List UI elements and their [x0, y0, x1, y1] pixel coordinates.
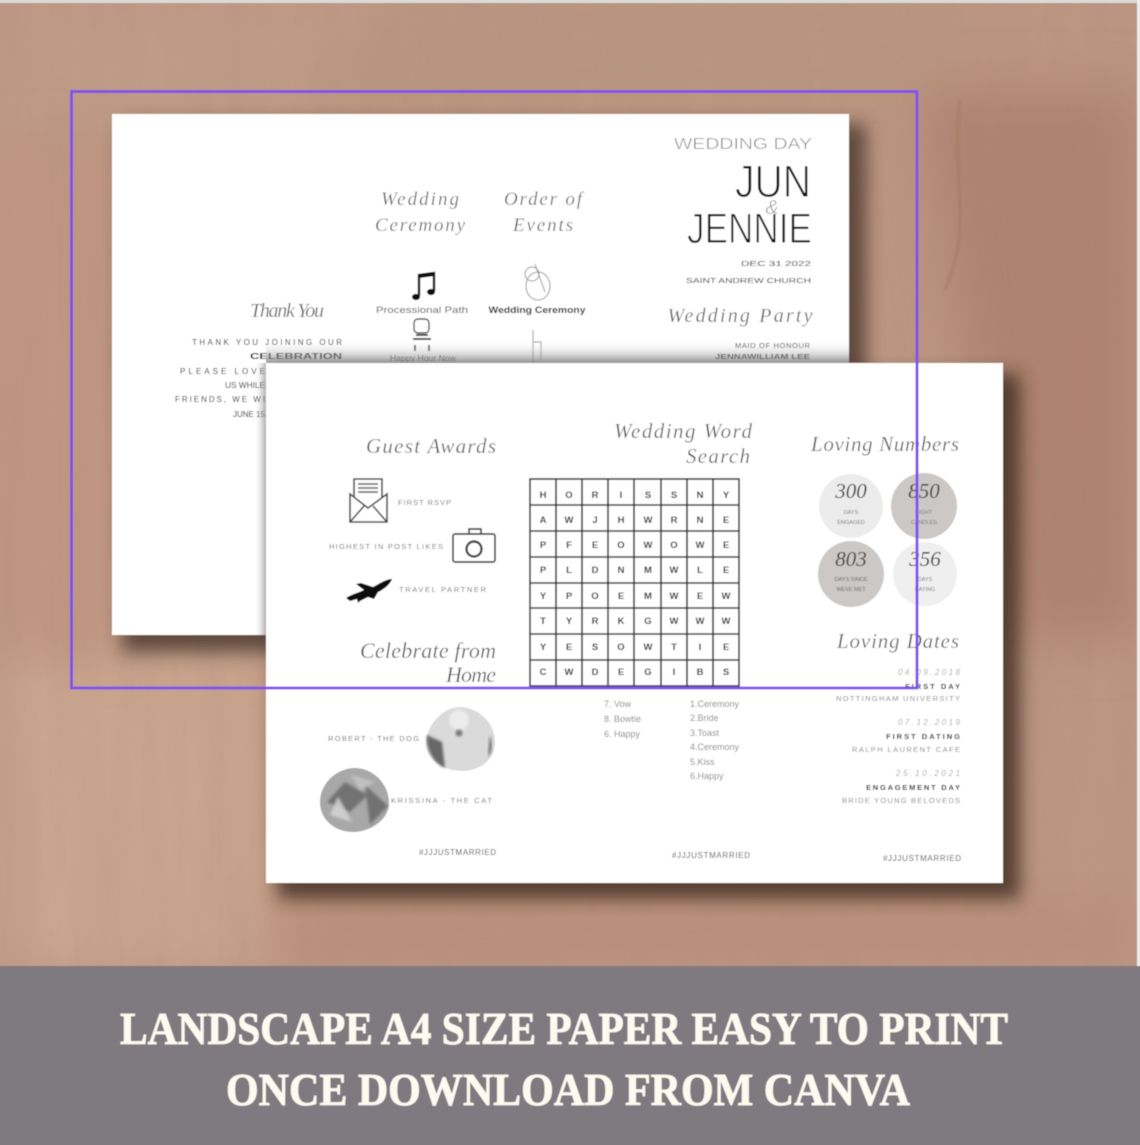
text: timeline dates: ENGAGEMENT DAY: [866, 783, 960, 792]
icon: wedding rings: [525, 264, 550, 300]
text: hashtag right: #JJJUSTMARRIED: [883, 854, 961, 863]
chart: word search grid: E: [723, 540, 729, 551]
text: word list one: 8. Bowtie: [604, 714, 641, 724]
chart: word search grid: G: [644, 667, 652, 678]
chart: word search grid: E: [618, 591, 624, 602]
text: cat caption: KRISSINA - THE CAT: [391, 796, 493, 805]
text: word list two: 2.Bride: [690, 713, 719, 723]
chart: word search grid: J: [592, 515, 598, 526]
text: party names: MAID OF HONOUR: [735, 341, 811, 350]
text: party names: JENNAWILLIAM LEE: [715, 352, 810, 361]
chart: word search grid: F: [566, 540, 572, 551]
text: thank you note: PLEASE LOVE: [180, 367, 265, 376]
text: first rsvp: FIRST RSVP: [398, 498, 452, 507]
chart: word search grid: G: [644, 616, 652, 627]
chart: word search grid: I: [699, 642, 701, 653]
chart: word search grid: P: [566, 591, 573, 602]
heading: guest awards: Guest Awards: [366, 434, 496, 458]
text: date and venue: DEC 31 2022: [741, 259, 811, 268]
chart: word search grid: M: [644, 591, 652, 602]
chart: word search grid: W: [670, 591, 679, 602]
chart: stat circle 356: DAYS: [918, 577, 933, 583]
icon: envelope: [350, 479, 387, 522]
heading: celebrate from home: Home: [445, 662, 496, 687]
text: timeline dates: BRIDE YOUNG BELOVEDS: [842, 796, 960, 805]
chart: word search grid: R: [592, 616, 599, 627]
chart: stat circle 300: DAYS: [844, 510, 859, 516]
chart: word search grid: O: [617, 642, 625, 653]
chart: word search grid: T: [540, 616, 546, 627]
text: happy moments: Happy Hour Now: [390, 354, 456, 363]
heading: thank you: Thank You: [250, 300, 324, 322]
chart: stat circle 356: 356: [908, 547, 941, 571]
heading: wedding word search: Search: [686, 444, 750, 468]
chart: word search grid: T: [671, 642, 677, 653]
panel: back sheet: [112, 114, 849, 635]
chart: word search grid: N: [697, 490, 704, 501]
chart: word search grid: H: [540, 490, 547, 501]
chart: word search grid: S: [592, 642, 598, 653]
heading: order of events: Events: [512, 215, 573, 236]
chart: word search grid: K: [618, 616, 625, 627]
heading: loving dates: Loving Dates: [836, 629, 959, 653]
chart: word search grid: W: [696, 540, 705, 551]
text: travel partner: TRAVEL PARTNER: [399, 585, 487, 594]
text: thank you note: JUNE 15: [233, 410, 266, 419]
chart: word search grid: L: [697, 565, 703, 576]
chart: word search grid: Y: [566, 616, 573, 627]
chart: word search grid: L: [566, 565, 572, 576]
chart: stat circle 850: 850: [908, 479, 940, 503]
chart: stat circle 803: 803: [835, 547, 867, 571]
heading: wedding word search: [614, 419, 752, 468]
text: word list two: [690, 699, 740, 781]
text: word list two: 3.Toast: [690, 728, 720, 738]
text: processional: Processional Path: [376, 305, 468, 316]
heading: order of events: [504, 189, 585, 236]
icon: chair: [413, 319, 431, 351]
chart: word search grid: S: [723, 667, 729, 678]
heading: wedding party: Wedding Party: [668, 305, 813, 327]
heading: celebrate from home: Celebrate from: [360, 638, 496, 663]
text: thank you note: CELEBRATION: [250, 352, 342, 361]
panel: front sheet shadow: [277, 374, 1020, 899]
chart: word search grid: S: [671, 490, 677, 501]
chart: word search grid: W: [722, 616, 731, 627]
heading: loving numbers: Loving Numbers: [810, 432, 959, 456]
frame: purple A4 outline: [72, 92, 917, 688]
chart: stat circle 850: CANDLES: [911, 520, 937, 526]
icon: cat photo: [320, 768, 389, 832]
chart: word search grid: D: [592, 667, 599, 678]
text: word list two: 4.Ceremony: [690, 742, 740, 752]
chart: word search grid: W: [565, 667, 574, 678]
chart: word search grid: W: [670, 616, 679, 627]
chart: word search grid: A: [540, 515, 547, 526]
chart: word search grid: C: [540, 667, 547, 678]
heading: celebrate from home: [360, 638, 496, 687]
chart: word search grid: O: [670, 540, 678, 551]
chart: word search grid: Y: [723, 490, 730, 501]
chart: word search grid: E: [723, 642, 729, 653]
chart: word search grid: N: [618, 565, 625, 576]
text: timeline dates: FIRST DAY: [905, 682, 960, 691]
chart: word search grid: B: [697, 667, 704, 678]
text: hashtag centre: #JJJUSTMARRIED: [672, 851, 750, 860]
chart: word search grid: E: [566, 642, 572, 653]
text: timeline dates: 04.09.2018: [898, 668, 961, 677]
text: word list one: 7. Vow: [604, 699, 632, 709]
title: couple names: JUN: [735, 156, 811, 207]
chart: word search grid: I: [620, 490, 622, 501]
text: hashtag left: #JJJUSTMARRIED: [419, 848, 496, 857]
text: dog caption: ROBERT - THE DOG: [328, 734, 420, 743]
panel: back sheet shadow: [122, 124, 866, 652]
icon: camera: [453, 529, 495, 562]
text: word list two: 1.Ceremony: [690, 699, 740, 709]
chart: word search grid: E: [697, 591, 703, 602]
chart: stat circle 356: DATING: [915, 587, 935, 593]
chart: stat circle 850: [891, 473, 957, 539]
chart: word search grid: O: [617, 540, 625, 551]
chart: word search grid: O: [565, 490, 573, 501]
heading: wedding ceremony: Wedding: [381, 189, 459, 210]
text: date and venue: SAINT ANDREW CHURCH: [686, 276, 811, 285]
heading: wedding day: WEDDING DAY: [674, 136, 812, 153]
chart: word search grid: H: [618, 515, 625, 526]
text: word list two: 6.Happy: [690, 771, 724, 781]
heading: wedding word search: Wedding Word: [614, 419, 752, 443]
text: word list two: 5.Kiss: [690, 757, 715, 767]
chart: word search grid: [530, 479, 739, 686]
chart: word search grid: W: [722, 591, 731, 602]
chart: word search grid: W: [565, 515, 574, 526]
chart: word search grid: M: [644, 565, 652, 576]
chart: stat circle 300: [819, 474, 883, 538]
text: word list one: 6. Happy: [604, 729, 641, 739]
chart: stat circle 300: ENGAGED: [837, 520, 865, 526]
chart: word search grid: S: [645, 490, 651, 501]
text: timeline dates: 25.10.2021: [895, 769, 960, 778]
panel: front sheet: [266, 363, 1003, 883]
icon: dog photo: [426, 707, 495, 771]
title: couple names: [687, 156, 812, 253]
text: timeline dates: FIRST DATING: [886, 732, 960, 741]
chart: word search grid: E: [592, 540, 598, 551]
icon: glass: [533, 330, 541, 362]
chart: word search grid: Y: [540, 642, 547, 653]
chart: word search grid: W: [670, 565, 679, 576]
text: thank you note: [175, 338, 342, 419]
icon: airplane: [346, 579, 392, 603]
text: thank you note: US WHILE: [225, 381, 265, 390]
chart: word search grid: P: [540, 540, 547, 551]
title: couple names: JENNIE: [687, 205, 812, 253]
text: highest in post likes: HIGHEST IN POST LIKES: [329, 542, 444, 551]
chart: word search grid: Y: [540, 591, 547, 602]
icon: music note: [412, 273, 434, 300]
chart: word search grid: I: [673, 667, 675, 678]
text: timeline dates: 07.12.2019: [898, 718, 961, 727]
heading: wedding ceremony: [375, 189, 466, 236]
chart: stat circle 850: LIGHT: [916, 510, 933, 516]
heading: wedding ceremony: Ceremony: [375, 215, 466, 236]
text: party names: [715, 341, 811, 361]
title: couple names: &: [765, 197, 779, 219]
chart: word search grid: E: [723, 515, 729, 526]
chart: word search grid: W: [644, 540, 653, 551]
text: thank you note: FRIENDS, WE WI: [175, 395, 265, 404]
chart: word search grid: E: [618, 667, 624, 678]
text: timeline dates: RALPH LAURENT CAFE: [852, 745, 960, 754]
chart: stat circle 803: [818, 541, 884, 607]
chart: stat circle 300: 300: [834, 479, 867, 503]
text: timeline dates: [836, 668, 961, 805]
chart: word search grid: W: [644, 642, 653, 653]
heading: order of events: Order of: [504, 189, 585, 210]
text: timeline dates: NOTTINGHAM UNIVERSITY: [836, 694, 960, 703]
chart: stat circle 803: WEVE MET: [836, 587, 866, 593]
chart: word search grid: O: [591, 591, 599, 602]
chart: word search grid: W: [644, 515, 653, 526]
text: wedding ceremony label: Wedding Ceremony: [488, 305, 586, 316]
text: thank you note: THANK YOU JOINING OUR: [192, 338, 342, 347]
chart: word search grid: W: [696, 616, 705, 627]
chart: word search grid: R: [592, 490, 599, 501]
chart: stat circle 356: [893, 542, 957, 606]
chart: word search grid: N: [697, 515, 704, 526]
text: word list one: [604, 699, 641, 739]
banner text line one: LANDSCAPE A4 SIZE PAPER EASY TO PRINT: [120, 1003, 1008, 1054]
chart: word search grid: E: [723, 565, 729, 576]
chart: word search grid: R: [671, 515, 678, 526]
banner text line two: ONCE DOWNLOAD FROM CANVA: [226, 1064, 910, 1115]
chart: word search grid: D: [592, 565, 599, 576]
text: date and venue: [686, 259, 811, 285]
chart: word search grid: P: [540, 565, 547, 576]
chart: stat circle 803: DAYS SINCE: [835, 577, 868, 583]
banner: [0, 966, 1140, 1145]
